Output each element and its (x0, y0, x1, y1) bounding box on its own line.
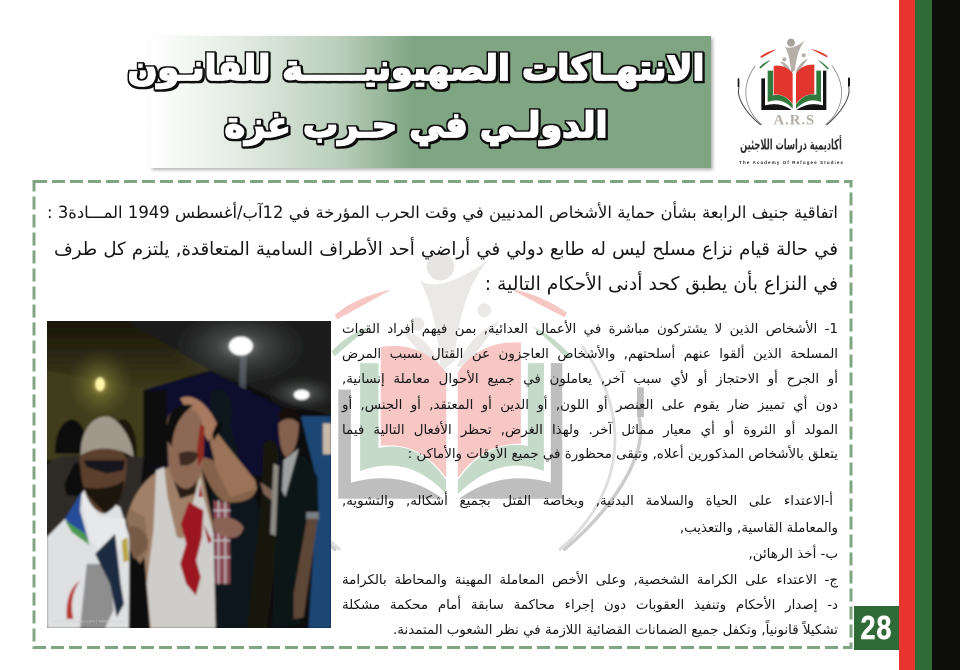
page number badge: 28 (861, 609, 892, 646)
line: والمعاملة القاسية, والتعذيب, (680, 521, 838, 536)
paragraph 2: prohibited acts (342, 492, 838, 638)
heading line 2: في حالة قيام نزاع مسلح ليس له طابع دولي في أراضي أحد الأطراف السامية المتعاقدة, يلتزم كل طرف (54, 239, 838, 260)
watermark logo (331, 253, 644, 552)
paragraph 1 (341, 320, 838, 462)
standing young man (279, 410, 299, 457)
man in cap (47, 489, 129, 628)
photo: injured man in Gaza being helped (47, 321, 331, 628)
page number badge (854, 606, 899, 650)
title banner: الدولـي في حـرب غزة (224, 106, 607, 146)
line: أ-الاعتداء على الحياة والسلامة البدنية, وبخاصة القتل بجميع أشكاله, والتشويه, (342, 494, 833, 509)
title banner (128, 36, 715, 172)
logo letters: A.R.S (774, 113, 815, 129)
title banner: الانتهـاكات الصهيونيـــــة للقانـون (128, 49, 704, 89)
white vest with blood (147, 467, 216, 628)
logo: Academy of Refugee Studies (738, 38, 850, 165)
line: دون أي تمييز ضار يقوم على العنصر أو اللون, أو الدين أو المعتقد, أو الجنس, أو (342, 398, 838, 413)
heading line 3: في النزاع بأن يطبق كحد أدنى الأحكام التالية : (485, 274, 838, 295)
line: المولد أو الثروة أو أي معيار مماثل آخر. ولهذا الغرض, تحظر الأفعال التالية فيما (342, 423, 838, 438)
injured man head (167, 407, 204, 490)
car (43, 455, 143, 540)
side stripes (899, 0, 960, 670)
convention heading text (47, 201, 838, 295)
line: د- إصدار الأحكام وتنفيذ العقوبات دون إجراء محاكمة سابقة أمام محكمة مشكلة (342, 598, 838, 613)
article body text (341, 320, 838, 638)
line: يتعلق بالأشخاص المذكورين أعلاه, وتبقى محظورة في جميع الأوقات والأماكن : (408, 447, 838, 462)
line: ب- أخذ الرهائن, (748, 547, 838, 562)
line: أو الجرح أو الاحتجاز أو لأي سبب آخر, يعاملون في جميع الأحوال معاملة إنسانية, (342, 372, 838, 387)
line: ج- الاعتداء على الكرامة الشخصية, وعلى الأخص المعاملة المهينة والمحاطة بالكرامة (342, 573, 838, 588)
line: 1- الأشخاص الذين لا يشتركون مباشرة في الأعمال العدائية, بمن فيهم أفراد القوات (342, 322, 838, 337)
heading line 1: اتفاقية جنيف الرابعة بشأن حماية الأشخاص المدنيين في وقت الحرب المؤرخة في 12آب/أغسطس 1949 المـــادة3 : (47, 203, 838, 222)
background people (210, 390, 260, 628)
photo watermark: www.Safamages.com | www.Safa.ps (53, 619, 123, 624)
ceiling and walls (43, 317, 210, 390)
logo english caption: The Academy Of Refugee Studies (739, 160, 843, 165)
line: المسلحة الذين ألقوا عنهم أسلحتهم, والأشخاص العاجزون عن القتال بسبب المرض (342, 347, 838, 362)
line: تشكيلاً قانونياً, وتكفل جميع الضمانات القضائية اللازمة في نظر الشعوب المتمدنة. (393, 623, 838, 638)
injured man body and arm (127, 464, 215, 628)
